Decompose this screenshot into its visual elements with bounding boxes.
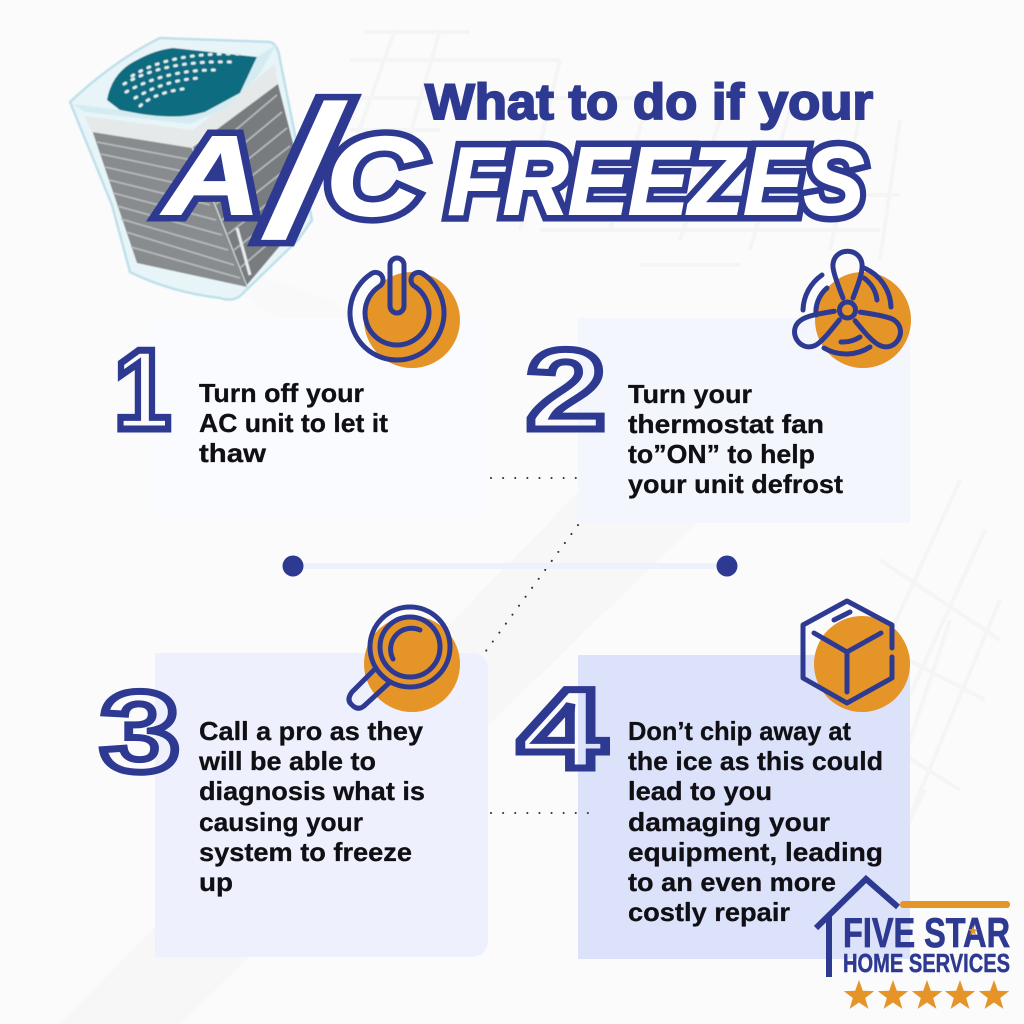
heading: FREEZES: FREEZES (448, 128, 864, 235)
connector: dotted diagonal (483, 525, 578, 655)
heading: FREEZES: FREEZES (448, 128, 864, 235)
number 4: 4 (518, 666, 606, 793)
icon: magnifying glass (349, 607, 460, 712)
panel: step 1 (150, 318, 485, 518)
icon: power button (350, 258, 460, 368)
step 4 text: to an even more (628, 867, 836, 897)
heading: A/C: A (160, 113, 261, 238)
step 3 text: up (199, 867, 233, 897)
step 2 text: thermostat fan (628, 409, 824, 439)
illustration: frozen AC unit (70, 38, 312, 300)
step 4 text: the ice as this could (628, 746, 883, 776)
number 1: 1 (114, 327, 171, 454)
step 4 text: lead to you (628, 776, 772, 806)
step 3 text: diagnosis what is (199, 776, 425, 806)
step 2 text (628, 379, 843, 499)
number 3: 3 (100, 669, 180, 796)
step 1 text: Turn off your (199, 378, 364, 408)
icon: box (803, 601, 910, 712)
step 2 text: to”ON” to help (628, 439, 815, 469)
heading: A/C: A (160, 113, 261, 238)
step 1 text: AC unit to let it (199, 408, 388, 438)
heading: A/C: / (261, 67, 348, 279)
step 4 text (628, 716, 883, 927)
number 2: 2 (526, 327, 606, 454)
step 4 text: equipment, leading (628, 837, 883, 867)
step 3 text: Call a pro as they (199, 716, 424, 746)
icon: fan (789, 251, 911, 368)
heading: A/C (160, 67, 423, 279)
panel: step 3 (155, 653, 488, 957)
step 1 text (199, 378, 388, 468)
step 2 text: Turn your (628, 379, 752, 409)
panel: step 2 (578, 318, 910, 523)
step 4 text: Don’t chip away at (628, 716, 851, 746)
step 3 text: will be able to (198, 746, 376, 776)
step 1 text: thaw (199, 438, 267, 468)
heading: A/C: C (326, 114, 423, 239)
step 4 text: costly repair (628, 897, 790, 927)
step 3 text: causing your (199, 807, 363, 837)
divider with end dots (282, 556, 738, 576)
panel: step 4 (578, 655, 910, 959)
connector: dotted line between steps 3 and 4 (491, 812, 590, 814)
step 3 text (198, 716, 425, 897)
connector: dotted line between steps 1 and 2 (491, 477, 578, 479)
heading: What to do if your: What to do if your (425, 74, 873, 130)
step 4 text: damaging your (628, 807, 830, 837)
step 2 text: your unit defrost (628, 469, 843, 499)
logo: Five Star Home Services (816, 879, 1010, 1009)
heading: A/C: C (326, 114, 423, 239)
step 3 text: system to freeze (199, 837, 412, 867)
